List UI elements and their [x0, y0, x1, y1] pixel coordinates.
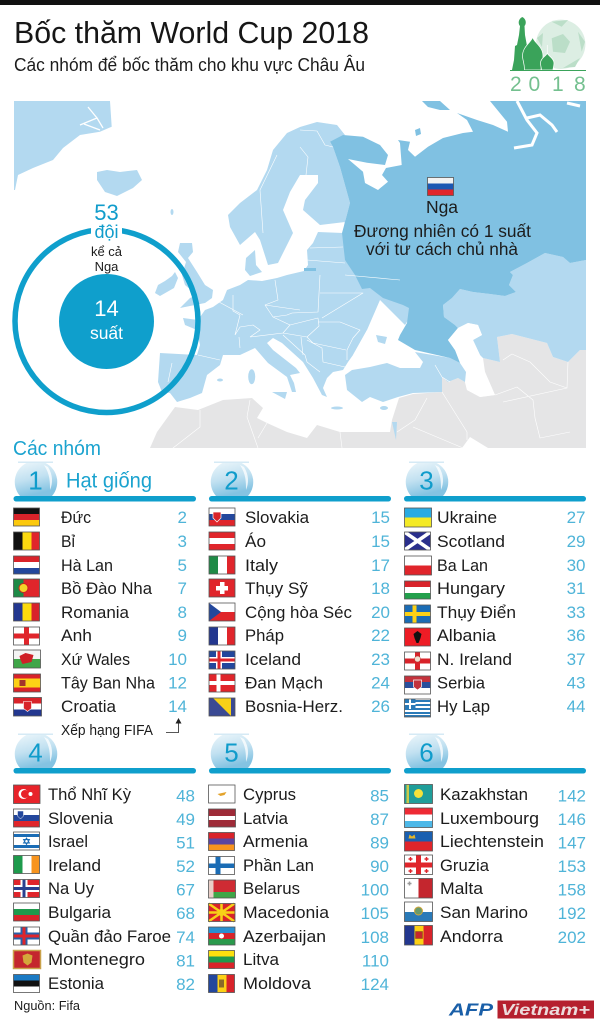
logo: Vietnam+: Vietnam+ [501, 1002, 590, 1019]
row: Áo: Áo [245, 532, 266, 551]
map: Ob Gulf [514, 101, 580, 148]
row: Bỉ: 3 [178, 532, 187, 551]
row: Cyprus: Cyprus [243, 786, 296, 804]
row: Macedonia [208, 904, 389, 923]
map: Russia [330, 101, 586, 363]
row: San Marino [404, 902, 586, 923]
row: Montenegro [14, 950, 195, 970]
group 1 header: 1 [28, 465, 43, 495]
row: Quần đảo Faroe: Quần đảo Faroe [48, 928, 171, 946]
group 4 list [14, 785, 195, 994]
row: Slovenia: 49 [176, 810, 195, 829]
group 2 header: 2 [224, 465, 239, 495]
map: Caspian Sea [448, 323, 495, 397]
label: 53: 53 [94, 200, 119, 225]
row: Ba Lan: 30 [567, 556, 586, 575]
row: Ukraine: Ukraine [437, 509, 497, 527]
row: Malta [404, 878, 586, 900]
row: Kazakhstan: Kazakhstan [440, 786, 528, 804]
row: N. Ireland [404, 650, 586, 670]
group 6 list [404, 784, 586, 947]
row: Liechtenstein: Liechtenstein [440, 833, 544, 851]
row: Bỉ [14, 532, 187, 551]
row: Kazakhstan [404, 784, 586, 806]
row: Bồ Đào Nha: 7 [178, 579, 187, 598]
row: Ba Lan: Ba Lan [437, 557, 488, 575]
map: Turkey and Caucasus [345, 352, 466, 402]
row: Thổ Nhĩ Kỳ: Thổ Nhĩ Kỳ [48, 786, 132, 804]
map: North Africa and Middle East [150, 334, 586, 448]
heading: Hạt giống: Hạt giống [66, 470, 152, 492]
row: Montenegro: Montenegro [48, 951, 145, 969]
map: Kaliningrad [304, 268, 316, 271]
heading: Các nhóm: Các nhóm [13, 438, 101, 460]
row: Thụy Điển: Thụy Điển [437, 604, 516, 622]
row: Romania [14, 603, 187, 622]
group 2 list [209, 508, 390, 716]
label: đội: đội [94, 222, 119, 242]
row: Pháp [209, 626, 390, 645]
row: Albania: 36 [567, 626, 586, 645]
row: Xứ Wales: Xứ Wales [61, 651, 130, 669]
row: Tây Ban Nha [14, 674, 187, 692]
row: Thụy Sỹ: 18 [371, 579, 390, 598]
label: host place line 1: Đương nhiên có 1 suất [354, 221, 531, 241]
row: Serbia: Serbia [437, 674, 486, 692]
row: Israel [14, 832, 195, 852]
row: Quần đảo Faroe [14, 927, 195, 947]
row: Hà Lan: 5 [178, 556, 187, 575]
row: Macedonia: Macedonia [243, 904, 330, 922]
group 5 header [209, 734, 391, 774]
row: Armenia [208, 832, 389, 852]
group 1 header [14, 462, 196, 502]
row: Hungary [404, 579, 586, 599]
row: Croatia: Croatia [61, 698, 117, 716]
row: Slovenia: Slovenia [48, 810, 114, 828]
row: Ireland: 52 [176, 857, 195, 876]
row: Cộng hòa Séc: 20 [371, 603, 390, 622]
map: arctic islands [415, 101, 450, 136]
row: Thụy Điển [404, 603, 586, 623]
row: Bulgaria: Bulgaria [48, 904, 112, 922]
row: Latvia: Latvia [243, 810, 289, 828]
row: Albania [404, 626, 586, 646]
row: Đan Mạch: Đan Mạch [245, 674, 323, 692]
logo: Vietnam+ [498, 1000, 594, 1019]
group 3 header [404, 462, 586, 502]
row: Moldova: Moldova [243, 975, 312, 993]
row: Liechtenstein [404, 832, 586, 852]
row: Cyprus [208, 785, 389, 806]
row: Đan Mạch: 24 [371, 674, 390, 692]
row: Na Uy: Na Uy [48, 880, 95, 898]
row: Azerbaijan [208, 927, 389, 947]
row: N. Ireland: N. Ireland [437, 651, 512, 669]
outer ring [15, 230, 198, 412]
title: Bốc thăm World Cup 2018 [14, 15, 369, 50]
row: Luxembourg: 146 [558, 810, 586, 829]
row: Iceland: Iceland [245, 651, 301, 669]
row: Armenia: 89 [370, 834, 389, 852]
row: Áo [209, 532, 390, 551]
row: Gruzia: 153 [558, 857, 586, 876]
group 6 header [404, 734, 586, 774]
row: Hà Lan: Hà Lan [61, 557, 113, 575]
row: Xứ Wales: 10 [168, 650, 187, 669]
row: Bosnia-Herz.: 26 [371, 697, 390, 716]
inner circle [59, 274, 154, 369]
logo: World Cup 2018 [510, 10, 586, 96]
map: Kazakhstan [443, 253, 586, 362]
row: Na Uy: 67 [176, 880, 195, 900]
ring gap [91, 222, 122, 236]
group 5 header: 5 [224, 737, 239, 767]
map: UK [178, 243, 213, 308]
row: Thụy Điển: 33 [567, 603, 586, 622]
row: Pháp: Pháp [245, 627, 284, 645]
row: Italy: Italy [245, 557, 279, 575]
source: Nguồn: Fifa [14, 998, 81, 1013]
row: San Marino: 192 [558, 904, 586, 923]
row: Moldova [208, 974, 389, 994]
row: Hà Lan [14, 556, 187, 575]
row: Romania: 8 [178, 603, 187, 622]
row: Bỉ: Bỉ [61, 533, 75, 551]
row: Xứ Wales [14, 650, 187, 669]
map: Ireland [155, 272, 178, 296]
logo: World Cup 2018: 2018 [510, 73, 586, 96]
map: Greenland [14, 101, 112, 190]
circle chart: 53 teams, 14 places [15, 200, 198, 412]
row: Litva: 110 [362, 952, 389, 970]
row: Thổ Nhĩ Kỳ: 48 [176, 786, 195, 806]
row: Đức: Đức [61, 509, 91, 527]
row: Phần Lan [208, 856, 389, 876]
row: Hy Lạp: Hy Lạp [437, 698, 490, 716]
group 2 header [209, 462, 391, 502]
label: Xếp hạng FIFA: Xếp hạng FIFA [61, 723, 153, 739]
map: Scandinavia [228, 122, 350, 265]
row: Ukraine [404, 508, 586, 527]
row: Scotland [404, 532, 586, 551]
row: Tây Ban Nha: 12 [168, 674, 187, 692]
top bar [0, 0, 600, 5]
row: Slovenia [14, 809, 195, 829]
row: Belarus: Belarus [243, 880, 300, 898]
row: Azerbaijan: Azerbaijan [243, 928, 326, 946]
row: Belarus [208, 880, 389, 900]
label: Nga: Nga [426, 197, 458, 217]
row: Latvia [208, 809, 389, 829]
row: Phần Lan: 90 [370, 857, 389, 876]
row: Luxembourg: Luxembourg [440, 810, 539, 828]
logo: AFP: AFP [448, 1000, 493, 1020]
row: Croatia: 14 [168, 697, 187, 716]
row: Bulgaria: 68 [176, 904, 195, 923]
row: Montenegro: 81 [176, 952, 195, 970]
row: Macedonia: 105 [361, 904, 389, 923]
group 3 list [404, 508, 586, 717]
row: Serbia: 43 [567, 674, 586, 692]
row: Belarus: 100 [361, 880, 389, 900]
row: Cộng hòa Séc [209, 603, 390, 622]
row: Albania: Albania [437, 627, 497, 645]
row: Đức: 2 [178, 508, 187, 527]
row: Malta: Malta [440, 880, 484, 898]
label: 14: 14 [94, 296, 119, 321]
row: Bosnia-Herz. [209, 697, 390, 716]
row: Slovakia [209, 508, 390, 527]
row: Ireland: Ireland [48, 857, 101, 875]
row: Luxembourg [404, 808, 586, 829]
map: Black Sea [352, 325, 423, 370]
row: Đan Mạch [209, 674, 390, 692]
map: Iceland [97, 170, 142, 196]
row: Azerbaijan: 108 [361, 928, 389, 947]
row: Malta: 158 [558, 880, 586, 900]
row: Hy Lạp [404, 697, 586, 717]
label: kể cả: kể cả [91, 244, 123, 259]
map: continental Europe [158, 220, 415, 402]
group 3 header: 3 [419, 465, 434, 495]
map: borders [168, 130, 570, 448]
row: Tây Ban Nha: Tây Ban Nha [61, 674, 156, 692]
row: Litva: Litva [243, 951, 280, 969]
row: Gruzia: Gruzia [440, 857, 490, 875]
row: Đức [14, 508, 187, 527]
row: Quần đảo Faroe: 74 [176, 928, 195, 947]
label: Nga: Nga [95, 259, 119, 274]
label: suất: suất [90, 323, 123, 343]
row: Iceland [209, 650, 390, 669]
row: San Marino: San Marino [440, 904, 528, 922]
row: Estonia [14, 974, 195, 994]
row: Serbia [404, 674, 586, 694]
row: Scotland: Scotland [437, 533, 505, 551]
row: Andorra: Andorra [440, 928, 504, 946]
row: Phần Lan: Phần Lan [243, 857, 314, 875]
row: Andorra: 202 [558, 928, 586, 947]
row: Slovakia: Slovakia [245, 509, 310, 527]
subtitle: Các nhóm để bốc thăm cho khu vực Châu Âu [14, 54, 365, 75]
map: Europe [14, 101, 586, 448]
row: Slovakia: 15 [371, 508, 390, 527]
group 5 list [208, 785, 389, 994]
row: Armenia: Armenia [243, 833, 309, 851]
row: Israel: Israel [48, 833, 88, 851]
row: Latvia: 87 [370, 810, 389, 829]
flag: Nga [428, 178, 454, 196]
row: Bosnia-Herz.: Bosnia-Herz. [245, 698, 343, 716]
row: Hungary: Hungary [437, 580, 506, 598]
row: Romania: Romania [61, 604, 130, 622]
row: Thụy Sỹ: Thụy Sỹ [245, 580, 309, 598]
row: Áo: 15 [371, 532, 390, 551]
row: Hy Lạp: 44 [567, 697, 586, 716]
map: small islands [170, 209, 397, 440]
row: Thụy Sỹ [209, 579, 390, 598]
row: Bồ Đào Nha [14, 579, 187, 598]
row: Thổ Nhĩ Kỳ [14, 785, 195, 806]
row: Italy: 17 [371, 556, 390, 575]
row: Hungary: 31 [567, 579, 586, 598]
row: Israel: 51 [176, 834, 195, 852]
row: Gruzia [404, 855, 586, 876]
row: Cyprus: 85 [370, 786, 389, 806]
row: Pháp: 22 [371, 626, 390, 645]
row: Ukraine: 27 [567, 508, 586, 527]
row: Italy [209, 556, 390, 575]
group 4 header: 4 [28, 737, 43, 767]
group 4 header [14, 734, 196, 774]
row: Kazakhstan: 142 [558, 786, 586, 806]
label: host place line 2: với tư cách chủ nhà [366, 239, 518, 259]
row: Scotland: 29 [567, 532, 586, 551]
row: Ba Lan [404, 556, 586, 575]
callout: Russia [354, 178, 531, 259]
row: Na Uy [14, 880, 195, 900]
row: Moldova: 124 [361, 975, 389, 994]
row: Anh: 9 [178, 626, 187, 645]
row: Croatia [14, 697, 187, 716]
map: Denmark [245, 250, 262, 276]
arrow: FIFA ranking [166, 718, 182, 732]
row: Bulgaria [14, 903, 195, 923]
row: N. Ireland: 37 [567, 650, 586, 669]
row: Litva [208, 950, 389, 970]
row: Estonia: Estonia [48, 975, 105, 993]
group 6 header: 6 [419, 737, 434, 767]
row: Liechtenstein: 147 [558, 834, 586, 852]
row: Estonia: 82 [176, 975, 195, 994]
row: Anh [14, 626, 187, 645]
row: Bồ Đào Nha: Bồ Đào Nha [61, 580, 153, 598]
row: Anh: Anh [61, 627, 92, 645]
row: Cộng hòa Séc: Cộng hòa Séc [245, 604, 352, 622]
map: Crimea [376, 335, 387, 344]
row: Andorra [404, 926, 586, 947]
row: Ireland [14, 856, 195, 876]
group 1 list [14, 508, 187, 716]
row: Iceland: 23 [371, 650, 390, 669]
